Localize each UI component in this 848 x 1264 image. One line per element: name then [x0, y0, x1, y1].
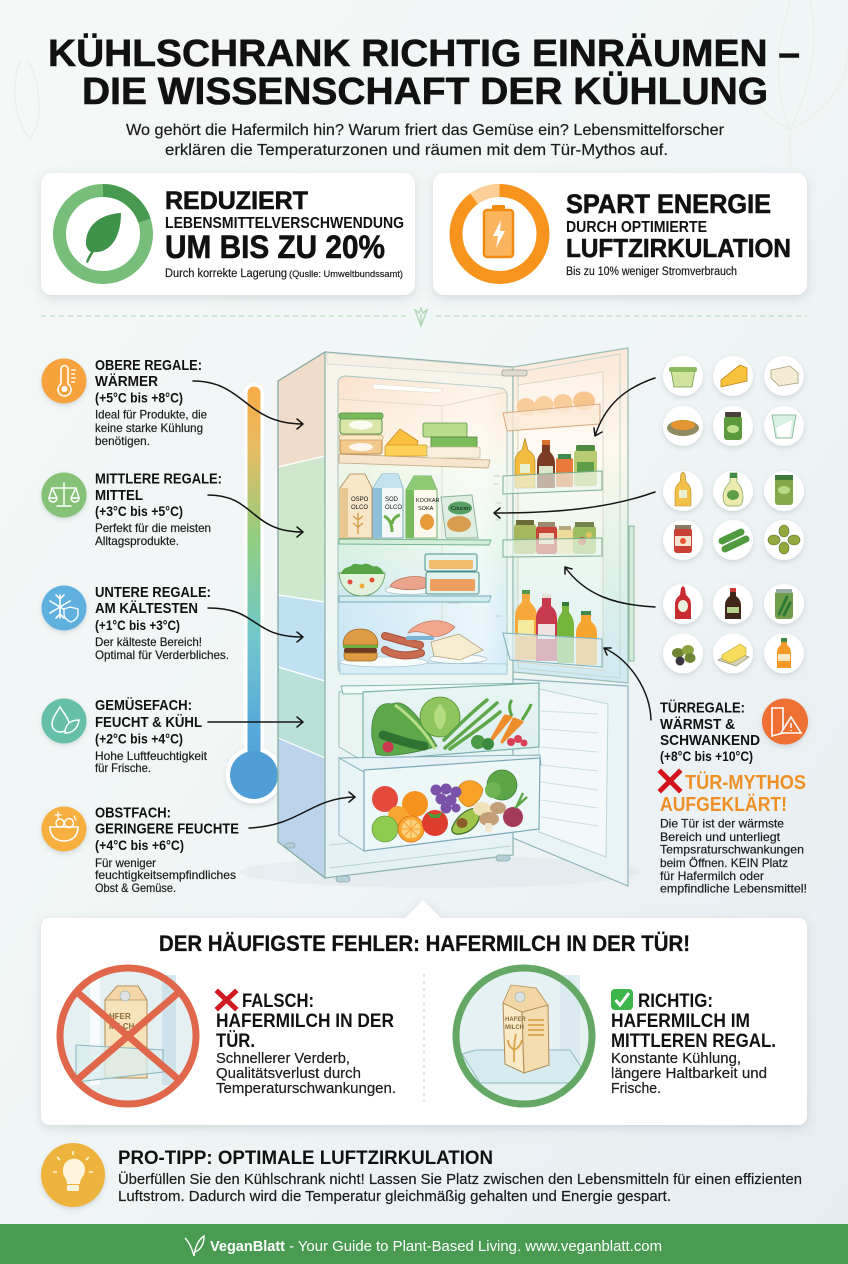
label text: GERINGERE FEUCHTE: [95, 820, 239, 838]
title: [48, 32, 800, 113]
myth heading: AUFGEKLÄRT!: [660, 793, 787, 816]
arrow: lower food icons to door: [565, 567, 655, 607]
food icon grid: [663, 356, 804, 674]
myth heading: [660, 771, 806, 816]
subtitle: Wo gehört die Hafermilch hin? Warum friert das Gemüse ein? Lebensmittelforscher: [126, 122, 725, 139]
middle shelf food: cartons and package: OLCO: [351, 505, 368, 511]
label text: MITTEL: [95, 487, 143, 504]
label text: [95, 584, 229, 662]
arrow: middle food icons to shelf: [494, 492, 655, 518]
right text: RICHTIG:: [638, 991, 713, 1012]
label text: [95, 697, 208, 775]
footer text: VeganBlatt: [210, 1238, 285, 1255]
door shelf: sauces and jars: [503, 438, 602, 494]
stat text: LEBENSMITTELVERSCHWENDUNG: [165, 215, 404, 232]
label text: feuchtigkeitsempfindliches: [95, 868, 236, 882]
arrow: gemüsefach to fridge: [208, 717, 303, 727]
zone: gemüsefach: [42, 697, 208, 775]
tip text: PRO-TIPP: OPTIMALE LUFTZIRKULATION: [118, 1148, 493, 1169]
middle shelf food: cartons and package: SOKA: [418, 506, 434, 512]
title: DIE WISSENSCHAFT DER KÜHLUNG: [82, 70, 768, 113]
label text: (+4°C bis +6°C): [95, 837, 184, 853]
food: pesto jar: [713, 406, 753, 446]
upper door: [502, 348, 628, 683]
label text: (+2°C bis +4°C): [95, 730, 183, 746]
label text: für Frische.: [95, 761, 151, 775]
door zone label: TÜRREGALE:: [660, 700, 745, 716]
food: orange juice: [764, 634, 804, 674]
door shelf: juice bottles: [503, 590, 602, 667]
lower shelf food: salad, ham, containers: [339, 554, 479, 596]
drawer: vegetables: [339, 683, 539, 761]
wrong text: FALSCH:: [242, 991, 314, 1012]
myth text: Bereich und unterliegt: [660, 830, 781, 844]
label text: GEMÜSEFACH:: [95, 697, 192, 714]
wrong text: Temperaturschwankungen.: [216, 1081, 396, 1097]
middle shelf food: cartons and package: Coucen: [451, 506, 470, 512]
donut: 10 percent: [456, 190, 543, 278]
fridge illustration: [240, 348, 640, 888]
label text: [95, 357, 207, 448]
stat text: (Quslle: Umweltbundssamt): [289, 269, 403, 280]
door shelf: jars: [503, 520, 602, 557]
icon: carton on shelf approved: HAFER: [505, 1017, 526, 1023]
food: olives dark: [663, 634, 703, 674]
icon: carton in door crossed out: HFER: [109, 1012, 131, 1021]
icon: footer leaf: [185, 1236, 204, 1256]
donut: 20 percent: [60, 190, 146, 278]
door shelf: eggs: [503, 392, 600, 431]
label text: (+1°C bis +3°C): [95, 617, 180, 633]
icon: fruit bowl: [42, 806, 86, 852]
food: soy sauce: [713, 584, 753, 624]
food: dressing: [713, 471, 753, 511]
stat text: LUFTZIRKULATION: [566, 233, 791, 263]
food: tofu: [764, 356, 804, 396]
zone: obere regale: [42, 357, 207, 448]
footer: [0, 1224, 848, 1264]
food: margarine tub: [663, 356, 703, 396]
zone: untere regale: [42, 584, 229, 662]
label text: (+3°C bis +5°C): [95, 503, 183, 519]
label text: [95, 470, 222, 548]
icon: thermometer: [42, 358, 86, 404]
heading: DER HÄUFIGSTE FEHLER: HAFERMILCH IN DER TÜR!: [159, 931, 690, 956]
wrong text: [216, 991, 396, 1097]
icon: light bulb: [41, 1143, 105, 1207]
wrong text: Schnellerer Verderb,: [216, 1051, 350, 1067]
label text: keine starke Kühlung: [95, 421, 203, 435]
label text: Obst & Gemüse.: [95, 881, 176, 895]
label text: Perfekt für die meisten: [95, 521, 211, 535]
stat text: Bis zu 10% weniger Stromverbrauch: [566, 266, 737, 278]
lower door: [513, 679, 628, 886]
label text: Ideal für Produkte, die: [95, 408, 207, 422]
footer text: - Your Guide to Plant-Based Living. www.veganblatt.com: [289, 1238, 662, 1255]
stat text: [566, 189, 791, 278]
label text: Alltagsprodukte.: [95, 534, 179, 548]
right text: MITTLEREN REGAL.: [611, 1031, 776, 1052]
label text: Optimal für Verderbliches.: [95, 648, 229, 662]
right text: [611, 989, 776, 1097]
drawer: fruit: [339, 755, 541, 851]
myth text: empfindliche Lebensmittel!: [660, 882, 807, 896]
door zone label: SCHWANKEND: [660, 732, 760, 749]
food: pickle jar: [764, 584, 804, 624]
food: relish jar: [764, 471, 804, 511]
middle shelf food: cartons and package: OLCO: [385, 505, 402, 511]
label text: OBSTFACH:: [95, 804, 171, 822]
feet: [285, 843, 510, 882]
icon: open door warning: [762, 698, 808, 744]
right text: längere Haltbarkeit und: [611, 1066, 767, 1082]
shelves: [339, 454, 507, 674]
top shelf food: tubs, cheese, tofu: [339, 413, 480, 458]
stat text: DURCH OPTIMIERTE: [566, 219, 707, 236]
arrow: obere regale to fridge: [193, 381, 303, 429]
myth text: Die Tür ist der wärmste: [660, 816, 784, 830]
tip text: [118, 1148, 802, 1205]
middle shelf food: cartons and package: OSPO: [351, 497, 369, 503]
icon: carton on shelf approved: MILCH: [505, 1025, 524, 1031]
middle shelf food: cartons and package: SOD: [385, 497, 399, 503]
icon: snowflake: [42, 586, 86, 630]
food: mustard: [663, 471, 703, 511]
panel: energy stat: [433, 173, 807, 295]
label text: Der kälteste Bereich!: [95, 635, 202, 649]
icon: green check: [611, 989, 633, 1010]
icon: carton on shelf approved: [456, 968, 592, 1104]
myth text: für Hafermilch oder: [660, 869, 764, 883]
label text: MITTLERE REGALE:: [95, 470, 222, 488]
myth text: beim Öffnen. KEIN Platz: [660, 856, 788, 870]
icon: scales: [42, 472, 86, 518]
arrow: mittlere regale to fridge: [208, 495, 303, 537]
right text: HAFERMILCH IM: [611, 1011, 750, 1032]
icon: divider leaf: [415, 308, 427, 326]
food: yogurt cup: [764, 406, 804, 446]
middle shelf food: cartons and package: KOOKAR: [416, 498, 440, 504]
arrow: obstfach to fridge: [249, 792, 355, 828]
middle shelf food: cartons and package: [340, 474, 478, 538]
food: cheese: [713, 356, 753, 396]
zone: mittlere regale: [42, 470, 222, 548]
fridge front body: [325, 352, 513, 878]
food: olives: [764, 520, 804, 560]
panel: door zone and myth: [660, 698, 808, 896]
stat text: Durch korrekte Lagerung: [165, 268, 287, 280]
label text: OBERE REGALE:: [95, 357, 202, 374]
title: KÜHLSCHRANK RICHTIG EINRÄUMEN –: [48, 32, 800, 75]
stat text: SPART ENERGIE: [566, 189, 771, 219]
tip text: Luftstrom. Dadurch wird die Temperatur gleichmäßig gehalten und Energie gespart.: [118, 1188, 671, 1205]
panel: food waste stat: [41, 173, 415, 295]
label text: WÄRMER: [95, 373, 158, 390]
door zone label: [660, 700, 760, 764]
bottom shelf food: burger, sausages, salmon, tofu: [340, 621, 487, 667]
stat text: REDUZIERT: [165, 187, 308, 215]
icon: battery: [484, 205, 513, 257]
subtitle: erklären die Temperaturzonen und räumen mit dem Tür-Mythos auf.: [165, 142, 668, 159]
right text: Konstante Kühlung,: [611, 1051, 741, 1067]
wrong text: HAFERMILCH IN DER: [216, 1011, 394, 1032]
arrow: untere regale to fridge: [208, 608, 303, 642]
subtitle: [126, 122, 725, 159]
stat text: [165, 187, 404, 280]
icon: leaf: [86, 213, 121, 263]
food: tomato jar: [663, 520, 703, 560]
tip text: Überfüllen Sie den Kühlschrank nicht! Lassen Sie Platz zwischen den Lebensmitteln für einen effizienten: [118, 1170, 802, 1188]
food: plated meal: [663, 406, 703, 446]
stat text: UM BIS ZU 20%: [165, 229, 385, 265]
label text: [95, 804, 239, 895]
label text: Für weniger: [95, 856, 156, 870]
panel: most common mistake: [41, 900, 807, 1125]
door zone label: (+8°C bis +10°C): [660, 748, 753, 764]
label text: benötigen.: [95, 434, 150, 448]
zone: obstfach: [42, 804, 239, 895]
wrong text: TÜR.: [216, 1031, 255, 1052]
food: cucumbers: [713, 520, 753, 560]
label text: Hohe Luftfeuchtigkeit: [95, 749, 208, 763]
arrow: top food icons to door: [594, 378, 655, 436]
thermometer: [226, 383, 282, 804]
arrow: door label to door shelf: [604, 648, 651, 720]
panel: pro tip: [41, 1143, 802, 1207]
food: butter: [713, 634, 753, 674]
door zone label: WÄRMST &: [660, 716, 735, 733]
icon: carton in door crossed out: MILCH: [109, 1022, 135, 1031]
wrong text: Qualitätsverlust durch: [216, 1066, 361, 1082]
label text: UNTERE REGALE:: [95, 584, 211, 601]
label text: FEUCHT & KÜHL: [95, 714, 202, 731]
door handle: [629, 526, 634, 661]
fridge side with temperature bands: [278, 352, 325, 878]
icon: water drop and leaf: [42, 698, 86, 744]
myth heading: TÜR-MYTHOS: [685, 771, 806, 794]
icon: carton in door crossed out: [60, 968, 196, 1104]
icon: red cross small: [218, 992, 235, 1008]
myth text: [660, 816, 807, 896]
label text: (+5°C bis +8°C): [95, 390, 183, 406]
food: ketchup: [663, 584, 703, 624]
icon: red cross: [661, 772, 679, 790]
right text: Frische.: [611, 1081, 661, 1097]
myth text: Tempsraturschwankungen: [660, 842, 804, 856]
inner compartment: [338, 376, 507, 674]
label text: AM KÄLTESTEN: [95, 600, 198, 617]
